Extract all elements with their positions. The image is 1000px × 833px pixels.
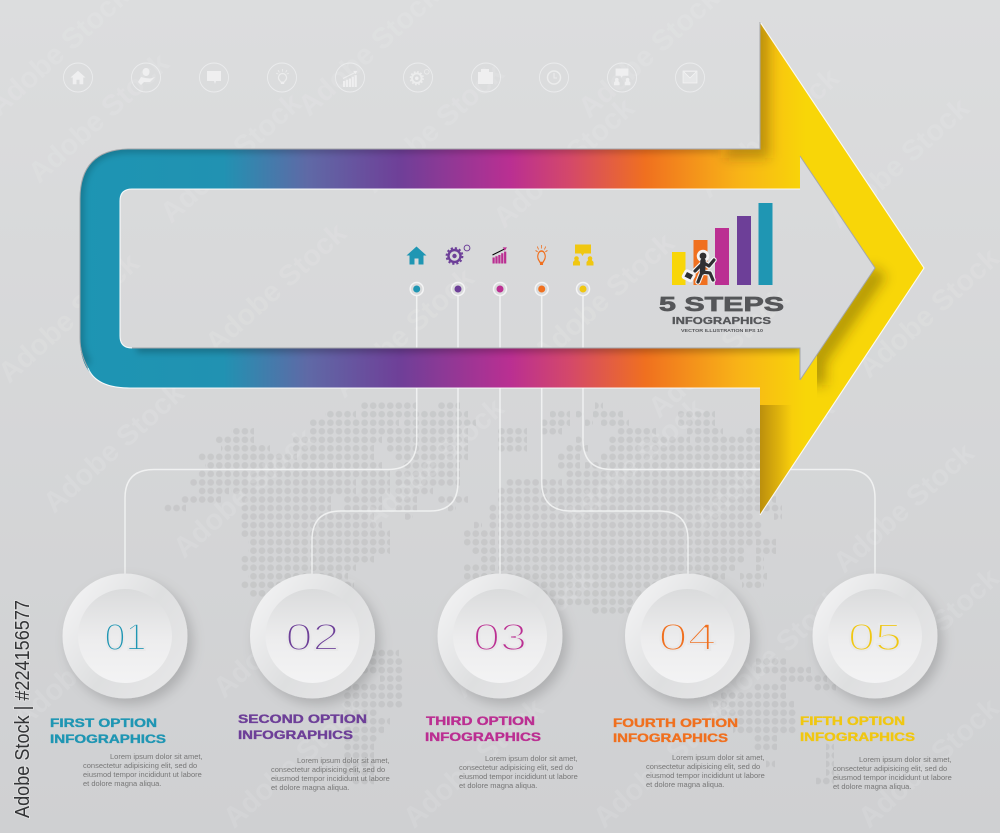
watermarks: Adobe Stock <box>557 392 711 535</box>
icon: people talking <box>573 244 594 266</box>
step 02 <box>238 574 390 792</box>
watermarks: Adobe Stock <box>22 47 176 190</box>
step 01: eiusmod tempor incididunt ut labore <box>83 770 202 779</box>
step 01: consectetur adipisicing elit, sed do <box>83 761 197 770</box>
step 03: Lorem ipsum dolor sit amet, <box>485 754 578 763</box>
title: 5 steps: VECTOR ILLUSTRATION EPS 10 <box>681 328 763 334</box>
step 03: eiusmod tempor incididunt ut labore <box>459 772 578 781</box>
icon: gears <box>446 245 470 264</box>
watermarks: Adobe Stock <box>167 422 321 565</box>
watermarks: Adobe Stock <box>397 692 551 833</box>
timeline pins <box>410 282 590 296</box>
step 03: THIRD OPTION <box>426 716 535 728</box>
step 01: Lorem ipsum dolor sit amet, <box>110 752 203 761</box>
watermarks: Adobe Stock <box>154 87 308 230</box>
title: 5 steps <box>659 294 784 334</box>
step 05: consectetur adipisicing elit, sed do <box>833 764 947 773</box>
watermarks: Adobe Stock <box>217 692 371 833</box>
step 05: et dolore magna aliqua. <box>833 782 911 791</box>
watermarks: Adobe Stock <box>327 262 481 405</box>
step 05 <box>800 574 952 791</box>
watermarks: Adobe Stock <box>827 437 981 580</box>
step 02: Lorem ipsum dolor sit amet, <box>297 756 390 765</box>
connector lines <box>125 296 875 578</box>
watermarks: Adobe Stock <box>357 392 511 535</box>
step 04: eiusmod tempor incididunt ut labore <box>646 771 765 780</box>
step 02: eiusmod tempor incididunt ut labore <box>271 774 390 783</box>
icon: growth chart <box>492 247 507 264</box>
step 02: SECOND OPTION <box>238 714 367 726</box>
step 01: et dolore magna aliqua. <box>83 779 161 788</box>
icon: light bulb <box>536 245 547 265</box>
title: 5 steps: 5 STEPS <box>659 294 784 316</box>
stock id side label: Adobe Stock | #224156577 <box>12 600 34 818</box>
step 02: et dolore magna aliqua. <box>271 783 349 792</box>
watermarks: Adobe Stock <box>527 227 681 370</box>
watermarks: Adobe Stock <box>687 392 841 535</box>
step 01 <box>50 574 203 788</box>
step 04 <box>613 574 765 789</box>
step 04: consectetur adipisicing elit, sed do <box>646 762 760 771</box>
title: 5 steps: INFOGRAPHICS <box>672 316 771 327</box>
step 05: INFOGRAPHICS <box>800 732 915 744</box>
step 02: 02 <box>286 617 340 659</box>
step 02: INFOGRAPHICS <box>238 730 353 742</box>
watermarks: Adobe Stock <box>447 562 601 705</box>
step 04: et dolore magna aliqua. <box>646 780 724 789</box>
step 05: Lorem ipsum dolor sit amet, <box>859 755 952 764</box>
step 01: FIRST OPTION <box>50 718 157 730</box>
watermarks: Adobe Stock <box>692 62 846 205</box>
step 01: INFOGRAPHICS <box>50 734 166 746</box>
step 02: consectetur adipisicing elit, sed do <box>271 765 385 774</box>
arrow ribbon <box>80 22 924 517</box>
step 04: Lorem ipsum dolor sit amet, <box>672 753 765 762</box>
step 03: INFOGRAPHICS <box>425 732 541 744</box>
watermarks: Adobe Stock <box>199 217 353 360</box>
step 01: 01 <box>104 617 146 659</box>
step 04: INFOGRAPHICS <box>613 733 728 745</box>
step 05: 05 <box>848 617 902 659</box>
step 04: FOURTH OPTION <box>613 718 738 730</box>
dotted world map <box>164 406 836 781</box>
step 04: 04 <box>658 617 716 659</box>
watermarks: Adobe Stock <box>357 57 511 200</box>
step 03: consectetur adipisicing elit, sed do <box>459 763 573 772</box>
watermarks: Adobe Stock <box>37 377 191 520</box>
step 05: FIFTH OPTION <box>800 716 905 728</box>
watermarks: Adobe Stock <box>487 92 641 235</box>
bar chart with runner <box>672 203 772 285</box>
central icons <box>406 244 594 266</box>
watermarks: Adobe Stock <box>587 692 741 833</box>
watermarks: Adobe Stock <box>207 562 361 705</box>
step 05: eiusmod tempor incididunt ut labore <box>833 773 952 782</box>
watermarks: Adobe Stock <box>642 282 796 425</box>
watermarks: Adobe Stock <box>822 92 976 235</box>
step 03: et dolore magna aliqua. <box>459 781 537 790</box>
watermarks: Adobe Stock <box>697 582 851 725</box>
top icon row <box>64 63 704 92</box>
step 03: 03 <box>473 617 527 659</box>
icon: running businessman <box>684 252 714 282</box>
watermarks: Adobe Stock <box>7 592 161 735</box>
step 03 <box>425 574 578 790</box>
icon: home <box>406 246 426 264</box>
